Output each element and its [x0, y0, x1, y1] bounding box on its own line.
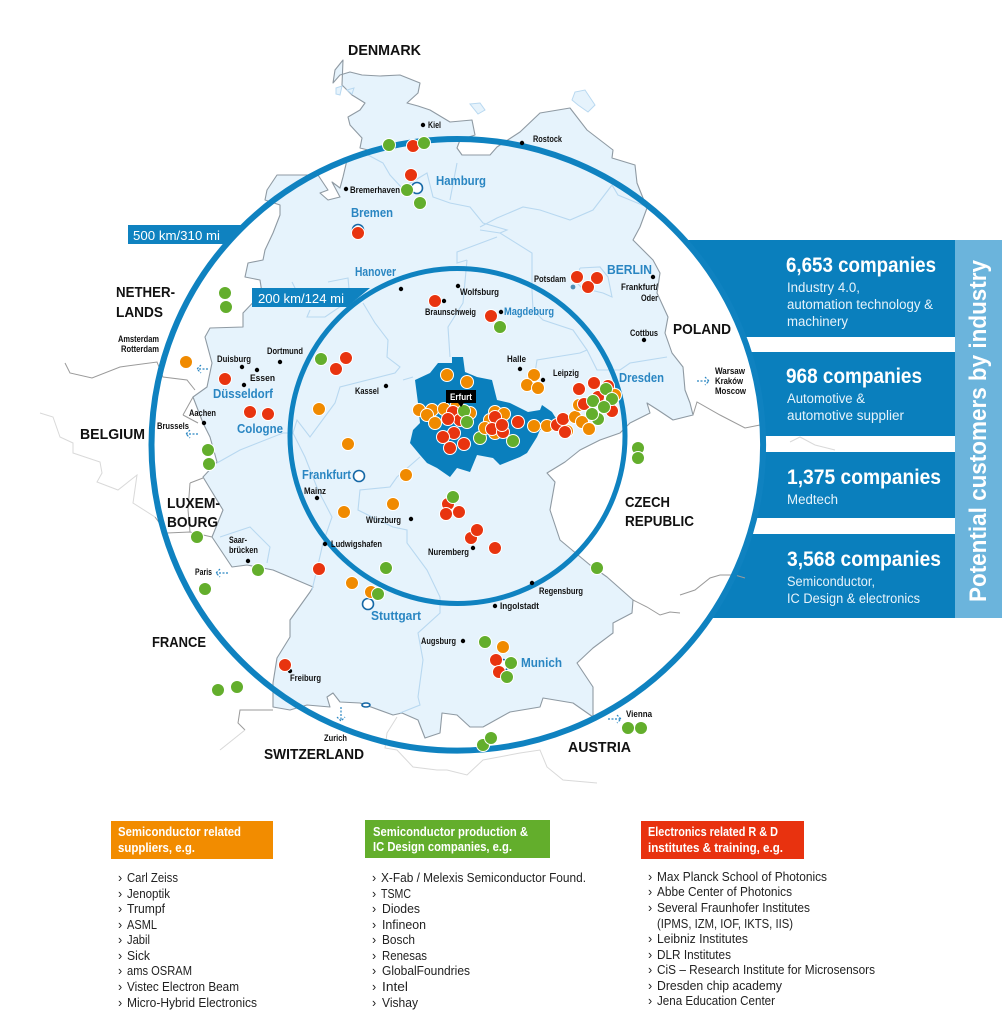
small city names: Kiel [428, 120, 441, 130]
legend: suppliers: Trumpf [127, 902, 166, 916]
city rings: Hamburg, Bremen, Frankfurt, Stuttgart, Munich, Lake [352, 182, 508, 707]
small city names: Saar- [229, 535, 247, 545]
panel text: Automotive: automotive supplier [787, 408, 904, 423]
small city names: Halle [507, 354, 526, 364]
major city names: Bremen [351, 205, 393, 220]
small city dots [202, 123, 655, 673]
legend: production and IC design: X-Fab / Melexis Semiconductor Found. [381, 871, 586, 885]
panel text: Semiconductor: 3,568 companies [787, 548, 941, 571]
islands and coast detail [336, 86, 595, 114]
legend: R and D institutes: › [648, 901, 652, 915]
data points: southern sites [212, 442, 648, 752]
legend: production and IC design: › [372, 980, 376, 994]
major city names: Hamburg [436, 173, 486, 188]
major city names: Dresden [619, 370, 664, 385]
legend: suppliers: › [118, 918, 122, 932]
legend: suppliers: › [118, 949, 122, 963]
legend: suppliers: Semiconductor related [118, 824, 241, 839]
region: Thuringia [410, 357, 557, 477]
outer distance ring 500 km [152, 139, 763, 751]
major city names: Hanover [355, 264, 396, 279]
country names: FRANCE [152, 634, 206, 651]
major city names: Munich [521, 655, 562, 670]
label: 200 km radius: 200 km/124 mi [258, 292, 344, 306]
legend: production and IC design: IC Design companies, e.g. [373, 839, 512, 854]
legend: suppliers: Carl Zeiss [127, 871, 178, 885]
legend: production and IC design [365, 820, 586, 1010]
data points: Thuringia east and Saxony [478, 368, 622, 448]
small city names: Nuremberg [428, 547, 469, 557]
small city names: Ingolstadt [500, 601, 539, 611]
country names: LANDS [116, 304, 163, 321]
legend: production and IC design: › [372, 964, 376, 978]
country names: DENMARK [348, 42, 421, 59]
legend: suppliers: Vistec Electron Beam [127, 980, 239, 994]
legend: R and D institutes: › [648, 994, 652, 1008]
small city names: Brussels [157, 421, 189, 431]
country names: SWITZERLAND [264, 746, 364, 763]
legend: production and IC design: Infineon [382, 918, 426, 932]
label: 500 km radius [128, 225, 241, 244]
legend: production and IC design: Intel [382, 980, 408, 994]
legend: production and IC design: › [372, 871, 376, 885]
country names: BELGIUM [80, 426, 145, 443]
legend: R and D institutes: (IPMS, IZM, IOF, IKTS, IIS) [657, 917, 793, 931]
small city names: Braunschweig [425, 307, 476, 317]
label: Erfurt [446, 390, 476, 407]
legend: production and IC design: GlobalFoundries [382, 964, 470, 978]
legend: suppliers: › [118, 933, 122, 947]
major city names: Frankfurt [302, 467, 352, 482]
legend: R and D institutes: › [648, 932, 652, 946]
legend: R and D institutes: Abbe Center of Photonics [657, 885, 792, 899]
panel text: Industry 4.0 [786, 254, 936, 329]
legend: R and D institutes: › [648, 948, 652, 962]
small city names: Duisburg [217, 354, 251, 364]
small city names: Vienna [626, 709, 652, 719]
small city names: Rostock [533, 134, 562, 144]
small city names: Zurich [324, 733, 347, 743]
legend: production and IC design: › [372, 902, 376, 916]
small city names: Kraków [715, 376, 743, 386]
label: Erfurt: Erfurt [450, 392, 473, 403]
legend: suppliers: ASML [127, 918, 157, 932]
small city names: Amsterdam [118, 334, 159, 344]
panel text: Medtech [787, 466, 941, 507]
legend: suppliers: › [118, 964, 122, 978]
panel: vertical side strip [955, 240, 1002, 618]
small city names: Paris [195, 567, 212, 577]
small city names: Würzburg [366, 515, 401, 525]
legend: production and IC design: Bosch [382, 933, 415, 947]
small city names: Warsaw [715, 366, 745, 376]
panel text: Industry 4.0: automation technology & [787, 297, 933, 312]
small city names: Ludwigshafen [331, 539, 382, 549]
major city names [213, 173, 664, 670]
legend: production and IC design: › [372, 949, 376, 963]
country names [80, 42, 731, 763]
neighbouring country borders [40, 362, 835, 783]
vertical heading: Potential customers by industry [965, 259, 992, 602]
data points: Thuringia west [412, 368, 486, 454]
label: 500 km radius: 500 km/310 mi [133, 229, 220, 243]
small city names: Cottbus [630, 328, 658, 338]
legend: production and IC design: Vishay [382, 996, 419, 1010]
small city names: Wolfsburg [460, 287, 499, 297]
country names: AUSTRIA [568, 739, 631, 756]
panel text: Industry 4.0: Industry 4.0, [787, 280, 860, 295]
panel text: Automotive: Automotive & [787, 391, 865, 406]
panel text: Semiconductor: Semiconductor, [787, 574, 875, 589]
panel text: Industry 4.0: 6,653 companies [786, 254, 936, 277]
legend: production and IC design: Semiconductor production & [373, 824, 528, 839]
legend: suppliers: Micro-Hybrid Electronics [127, 996, 257, 1010]
legend: R and D institutes: Jena Education Center [657, 994, 775, 1008]
legend: suppliers: › [118, 996, 122, 1010]
small city names [118, 120, 746, 743]
legend: suppliers: suppliers, e.g. [118, 840, 195, 855]
small city names: Potsdam [534, 274, 566, 284]
small city names: Mainz [304, 486, 327, 496]
country names: BOURG [167, 514, 218, 531]
country names: POLAND [673, 321, 731, 338]
country names: REPUBLIC [625, 513, 694, 530]
legend: R and D institutes: › [648, 979, 652, 993]
legend: R and D institutes: institutes & training, e.g. [648, 840, 783, 855]
panel text: Medtech: 1,375 companies [787, 466, 941, 489]
panel text: Automotive: 968 companies [786, 365, 922, 388]
legend: suppliers: › [118, 887, 122, 901]
small city names: Frankfurt/ [621, 282, 658, 292]
panel: companies by industry bands [650, 240, 955, 618]
legend: R and D institutes: DLR Institutes [657, 948, 731, 962]
legend: suppliers: ams OSRAM [127, 964, 192, 978]
panel text: Automotive [786, 365, 922, 423]
legend: R and D institutes: Electronics related R & D [648, 824, 778, 839]
legend: R and D institutes: Max Planck School of Photonics [657, 870, 827, 884]
legend: suppliers: › [118, 871, 122, 885]
small city names: Oder [641, 293, 658, 303]
major city names: Düsseldorf [213, 386, 274, 401]
small city names: Leipzig [553, 368, 579, 378]
legend: R and D institutes: CiS – Research Institute for Microsensors [657, 963, 875, 977]
major city names: Stuttgart [371, 608, 422, 623]
panel text: Medtech: Medtech [787, 492, 838, 507]
label: 200 km radius [252, 288, 370, 307]
legend: production and IC design: TSMC [381, 887, 411, 901]
state borders [217, 155, 667, 713]
small city names: Essen [250, 373, 275, 383]
legend: production and IC design: › [372, 933, 376, 947]
panel text: Semiconductor [787, 548, 941, 606]
data points: outside and northern sites [180, 136, 604, 596]
map: Germany [193, 60, 693, 738]
country names: NETHER- [116, 284, 175, 301]
legend: suppliers: Sick [127, 949, 151, 963]
country names: LUXEM- [167, 495, 220, 512]
legend: suppliers: Jenoptik [127, 887, 171, 901]
legend: production and IC design: › [372, 887, 376, 901]
small city names: Bremerhaven [350, 185, 400, 195]
legend: R and D institutes: › [648, 870, 652, 884]
country names: CZECH [625, 494, 670, 511]
legend: suppliers: Jabil [127, 933, 150, 947]
small city names: Rotterdam [121, 344, 159, 354]
legend: R and D institutes: Dresden chip academy [657, 979, 783, 993]
small city names: Dortmund [267, 346, 303, 356]
small city names: brücken [229, 545, 258, 555]
white disc of the distance circle [152, 140, 762, 750]
small city names: Moscow [715, 386, 746, 396]
legend: R and D institutes: › [648, 885, 652, 899]
legend: R and D institutes [641, 821, 875, 1008]
legend: production and IC design: › [372, 996, 376, 1010]
legend: production and IC design: › [372, 918, 376, 932]
major city names: Magdeburg [504, 306, 554, 318]
small city names: Regensburg [539, 586, 583, 596]
small city names: Freiburg [290, 673, 321, 683]
legend: production and IC design: Diodes [382, 902, 420, 916]
legend: production and IC design: Renesas [382, 949, 427, 963]
legend: suppliers: › [118, 980, 122, 994]
legend: R and D institutes: Several Fraunhofer Institutes [657, 901, 810, 915]
major city names: Cologne [237, 421, 283, 436]
legend: suppliers: › [118, 902, 122, 916]
major city names: BERLIN [607, 262, 652, 277]
small city names: Augsburg [421, 636, 456, 646]
dashed direction arrows [186, 365, 709, 723]
inner distance ring 200 km [290, 268, 625, 604]
legend: R and D institutes: Leibniz Institutes [657, 932, 748, 946]
legend: suppliers [111, 821, 273, 1010]
legend: R and D institutes: › [648, 963, 652, 977]
panel text: Industry 4.0: machinery [787, 314, 848, 329]
small city names: Kassel [355, 386, 379, 396]
small city names: Aachen [189, 408, 216, 418]
panel text: Semiconductor: IC Design & electronics [787, 591, 920, 606]
